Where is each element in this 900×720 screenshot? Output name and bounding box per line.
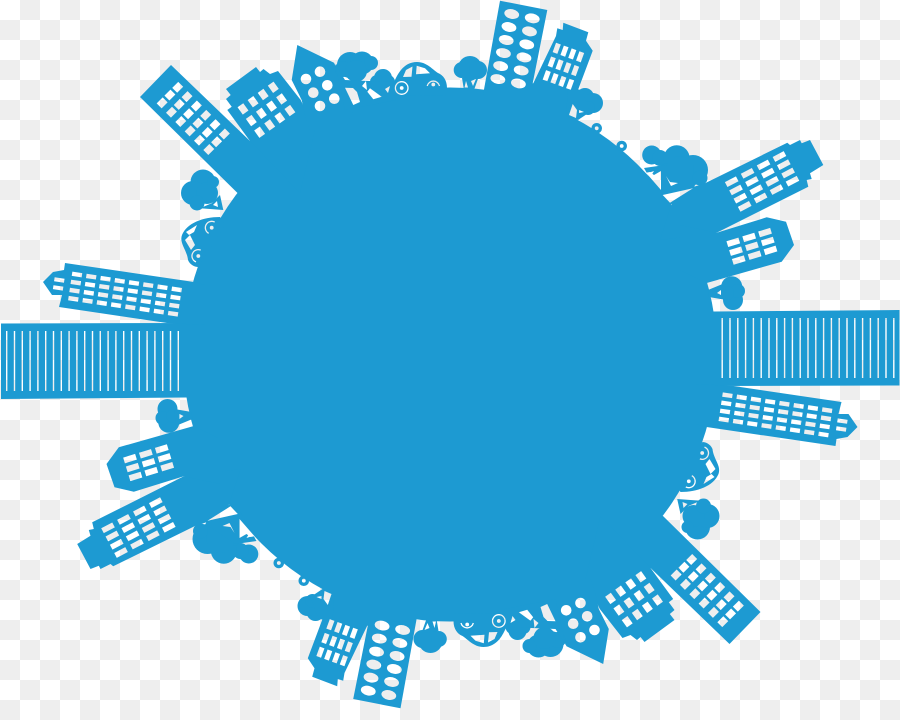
building: long capped tower upper left [43,263,205,325]
building: house with round windows [292,45,345,126]
tree: small top [454,56,487,90]
tree: small bottom [414,619,447,653]
building: long capped tower lower right [696,384,858,446]
tree and ground: left [181,170,223,210]
tree: top right [566,88,603,120]
building: inverted house with round windows [556,583,609,664]
tree: bottom left [298,589,334,621]
car: bottom [454,613,508,647]
building: stepped tower top right [512,22,593,114]
building: oval-window tower top [483,1,547,95]
building: square-window tower top left [140,65,268,193]
car: left [181,217,225,267]
building: stepped tower left [77,476,229,569]
wheel: ring three [298,575,309,586]
tree and ground: right [677,498,720,540]
building: oval-window tower bottom [353,614,418,708]
tree: small right [708,276,745,310]
tree: small left [156,399,192,433]
car: right [676,442,719,492]
globe [183,88,717,622]
building: wide striped tower right [710,310,900,386]
building: stepped tower top left [226,67,310,141]
trees: cluster beside house [335,52,396,110]
upper half of the city ring [1,1,823,399]
trees: large clump left [192,504,258,564]
building: capped tower right [680,217,794,283]
car: top [393,62,447,96]
building: capped tower left [106,426,220,492]
wheel: ring two [616,141,627,151]
wheel: ring one [591,123,602,134]
building: stepped tower right [660,140,823,240]
building: square-window tower bottom right [632,516,760,644]
trees: large clump right [642,145,708,205]
building: wide striped tower left [1,323,190,399]
lower half of the city ring [77,310,900,708]
trees: cluster beside inverted house [504,599,566,658]
building: stepped tower bottom left [308,595,388,686]
wheel: ring four [274,558,284,568]
building: stepped tower bottom right [591,568,674,642]
